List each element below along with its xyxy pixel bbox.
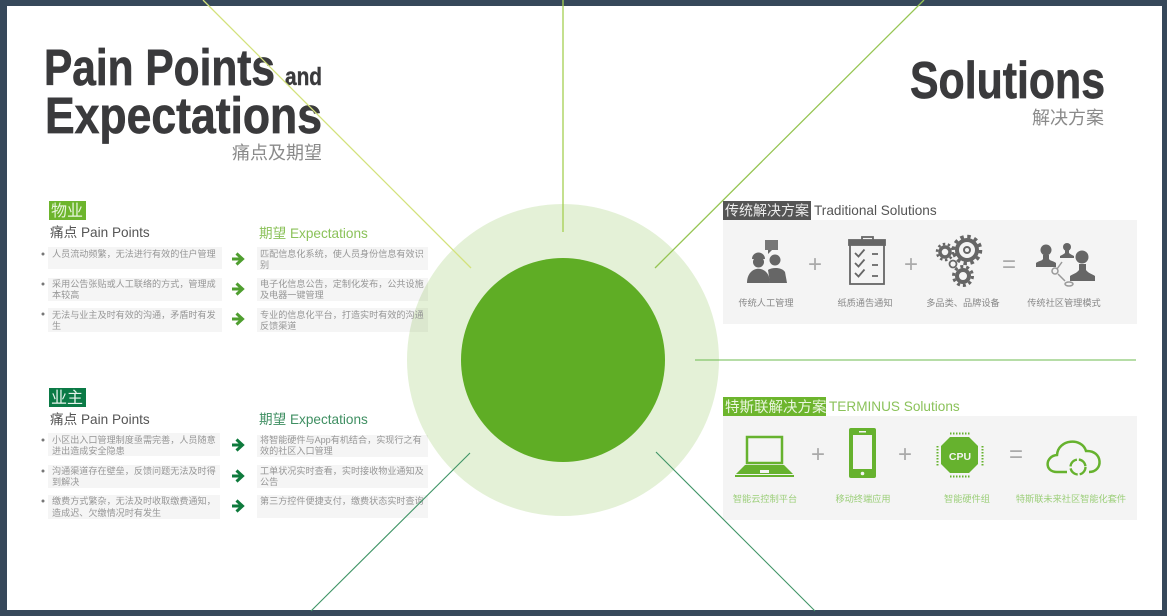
row 1: [42, 433, 428, 457]
row 1: 效的社区入口管理: [260, 445, 333, 456]
row 1: 进出造成安全隐患: [52, 445, 125, 456]
label: mobile app: 移动终端应用: [835, 493, 891, 504]
plus: +: [898, 441, 912, 468]
row 3: 第三方控件便捷支付，缴费状态实时查询: [260, 495, 424, 506]
icon: cloud: [1048, 442, 1100, 474]
row 1: 匹配信息化系统，使人员身份信息有效识: [260, 248, 424, 259]
plus: +: [808, 251, 822, 278]
background card: [723, 416, 1137, 520]
title: pain points and expectations: Expectations: [45, 87, 322, 144]
row 3: 缴费方式繁杂，无法及时收取缴费通知，: [52, 495, 216, 506]
icon: cpu: CPU: [949, 451, 971, 463]
panel: traditional solutions: [723, 201, 1137, 324]
equals: =: [1009, 441, 1023, 468]
label: hardware: 智能硬件组: [944, 493, 990, 504]
row 2: 沟通渠道存在壁垒，反馈问题无法及时得: [52, 465, 216, 476]
row 3: 反馈渠道: [260, 320, 296, 331]
title: pain points and expectations: 痛点及期望: [232, 143, 322, 163]
icon: gears: [937, 236, 980, 286]
label: terminus suite: 特斯联未来社区智能化套件: [1016, 493, 1126, 504]
title: pain points and expectations: and: [285, 63, 322, 91]
row 1: 人员流动频繁，无法进行有效的住户管理: [52, 248, 216, 259]
radial line: right: [695, 359, 1136, 361]
label: cloud platform: 智能云控制平台: [733, 493, 797, 504]
radial line: top: [562, 0, 564, 232]
row 2: 公告: [260, 476, 278, 487]
row 2: 采用公告张贴或人工联络的方式，管理成: [52, 278, 216, 289]
radial line: lower right: [656, 452, 815, 611]
tag: traditional: 传统解决方案: [725, 202, 809, 218]
row 2: 电子化信息公告，定制化发布，公共设施: [260, 278, 424, 289]
label: traditional mode: 传统社区管理模式: [1027, 297, 1101, 308]
heading: expectations: 期望 Expectations: [259, 226, 368, 241]
title: pain points and expectations: Pain Points: [44, 39, 275, 96]
label: devices: 多品类、品牌设备: [926, 297, 1000, 308]
row 1: 小区出入口管理制度亟需完善，人员随意: [52, 434, 216, 445]
icon: laptop: [735, 437, 794, 477]
row 2: 及电器一键管理: [260, 289, 324, 300]
row 1: [42, 247, 428, 270]
row 3: 无法与业主及时有效的沟通，矛盾时有发: [52, 309, 216, 320]
icon: community management: [1036, 243, 1095, 286]
heading: terminus solutions: TERMINUS Solutions: [829, 399, 960, 414]
title: solutions: [910, 52, 1105, 128]
panel: terminus solutions: [723, 397, 1137, 520]
radial line: upper left: [203, 0, 471, 268]
row 3: [42, 308, 428, 332]
title: solutions: 解决方案: [1032, 108, 1104, 128]
equals: =: [1002, 251, 1016, 278]
background card: [723, 220, 1137, 324]
radial line: lower left: [311, 453, 470, 611]
row 1: 别: [260, 260, 269, 270]
row 2: [42, 278, 428, 301]
row 3: 专业的信息化平台，打造实时有效的沟通: [260, 309, 424, 320]
plus: +: [904, 251, 918, 278]
row 3: 造成迟、欠缴情况时有发生: [52, 507, 161, 518]
title: solutions: Solutions: [910, 52, 1105, 110]
row 2: [42, 465, 428, 488]
icon: checklist: [849, 237, 885, 284]
icon: cpu: [938, 434, 982, 476]
heading: expectations: 期望 Expectations: [259, 412, 368, 427]
label: staff: 传统人工管理: [738, 297, 794, 308]
heading: traditional solutions: Traditional Solutions: [814, 203, 937, 218]
icon: phone: [849, 428, 876, 478]
row 2: 到解决: [52, 476, 79, 487]
tag: terminus: 特斯联解决方案: [725, 398, 827, 416]
panel: residents: [42, 388, 428, 519]
row 1: 将智能硬件与App有机结合，实现行之有: [260, 434, 422, 445]
heading: pain points: 痛点 Pain Points: [50, 411, 150, 427]
tag: property: 物业: [51, 202, 83, 220]
title: pain points and expectations: [44, 39, 322, 163]
label: paper notice: 纸质通告通知: [837, 297, 893, 308]
tag: residents: 业主: [51, 389, 83, 407]
heading: pain points: 痛点 Pain Points: [50, 224, 150, 240]
panel: property management: [42, 201, 428, 332]
icon: staff: [747, 240, 787, 283]
central circle: [407, 204, 719, 516]
row 2: 本较高: [52, 289, 79, 300]
row 2: 工单状况实时查看，实时接收物业通知及: [260, 465, 424, 476]
row 3: [42, 495, 428, 519]
row 3: 生: [52, 320, 61, 331]
radial line: upper right: [655, 0, 924, 268]
plus: +: [811, 441, 825, 468]
